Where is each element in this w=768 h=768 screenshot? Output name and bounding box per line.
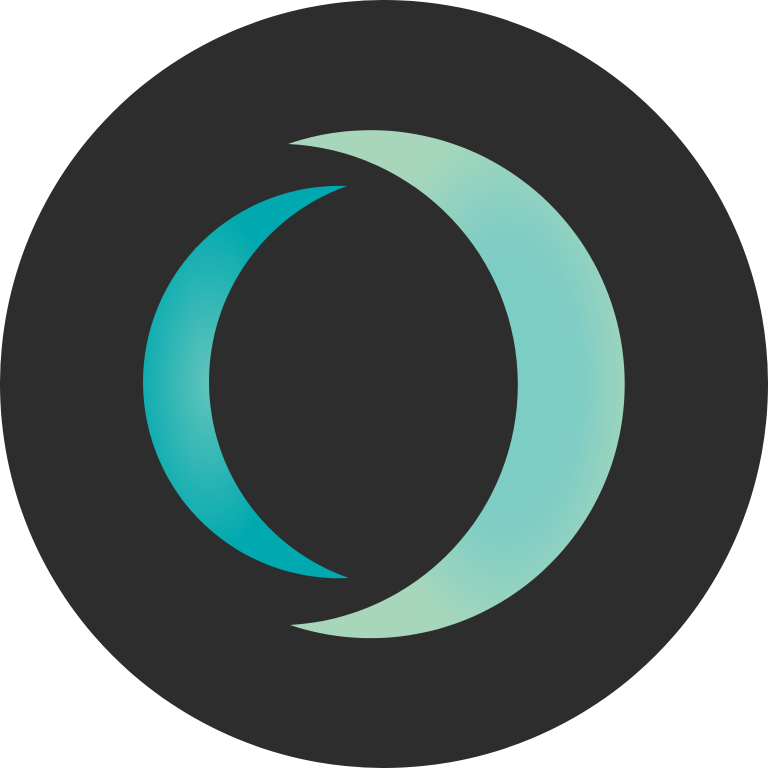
icon: small dark teal crescent — [143, 186, 349, 578]
icon: large light teal crescent — [288, 130, 625, 638]
